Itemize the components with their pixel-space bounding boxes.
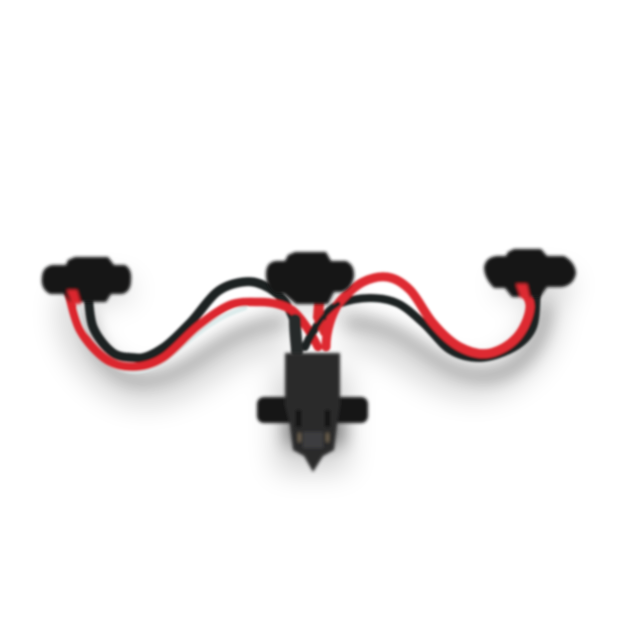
right black wire xyxy=(305,290,537,358)
plug details xyxy=(296,410,301,427)
central red wire xyxy=(318,292,325,332)
left black wire xyxy=(88,282,297,358)
connector: centre top xyxy=(266,252,354,304)
black wire crossing centre xyxy=(314,304,338,332)
connector: centre plug xyxy=(257,353,368,472)
plug body xyxy=(285,353,340,472)
connector: right xyxy=(484,249,576,298)
plug wings xyxy=(257,397,368,423)
pale halo under left wires xyxy=(77,308,245,371)
connector: left xyxy=(42,257,131,304)
wires xyxy=(68,277,537,371)
drop shadow xyxy=(70,285,570,470)
left red wire xyxy=(68,290,318,367)
black wire left of plug xyxy=(295,320,297,352)
right red wire xyxy=(326,277,530,354)
